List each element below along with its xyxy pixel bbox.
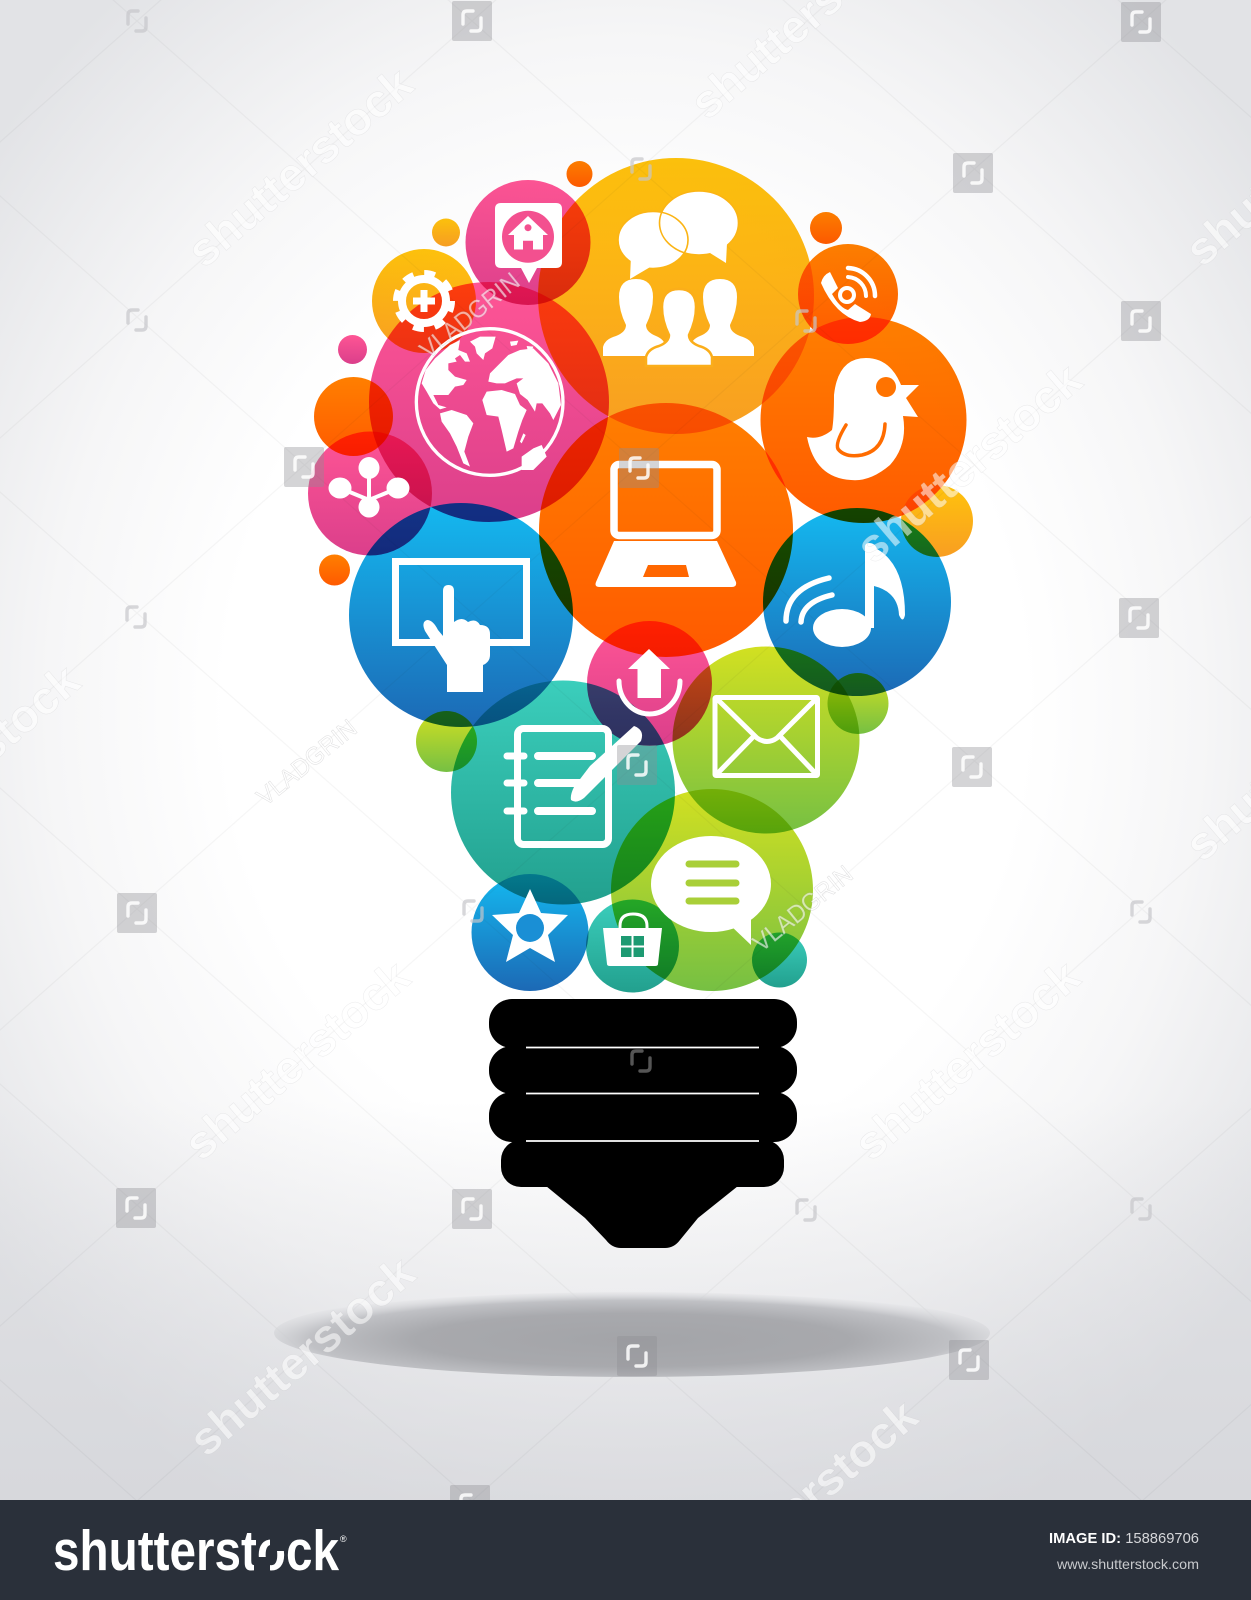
ground shadow [274,1289,990,1377]
bubble: gear [372,249,476,353]
bubble: music [763,508,951,696]
stock watermarks: shutterstock [179,1246,425,1466]
dot: orange lower left [319,554,350,586]
dot: orange left [314,377,393,456]
watermark tiles [116,1,1161,1525]
icon: chat bubble [651,836,771,945]
dot: yellow right [901,485,973,557]
image id: IMAGE ID: 158869706 [1049,1530,1199,1547]
icon: star [492,889,568,962]
bubble: network [308,432,432,556]
icon: mail [715,698,818,776]
icon: globe [416,329,563,475]
stock watermarks: shutterstock [174,950,420,1170]
icon: tablet and hand [396,562,526,692]
dot: teal right [752,932,807,988]
icon: laptop [596,464,736,587]
bubble: mail [672,646,860,834]
footer logo: shutterstock [53,1519,339,1583]
icon: upload [619,649,680,714]
bubble: star [472,874,588,991]
icon: network nodes [328,457,410,518]
dot: green right [828,673,888,734]
icon: music note [786,543,905,647]
bubble: home [466,180,590,305]
bubble: phone [798,244,898,344]
bulb screw base [489,999,797,1248]
icon: basket [603,914,662,966]
icon: speech bubbles [618,191,738,279]
bubble: laptop [539,403,793,657]
footer bar [0,1500,1251,1600]
bubble: bird [760,317,966,523]
dot: green left [416,711,477,772]
bubble: upload [587,621,712,746]
dot: orange top right [810,212,842,244]
stock watermarks: VLADGRIN [415,267,525,364]
icon: phone [821,268,875,322]
site url: www.shutterstock.com [1056,1556,1199,1572]
icon: people [603,279,754,366]
bubble: globe [369,282,609,522]
footer logo: ® [340,1534,347,1544]
bubble: notebook [451,680,675,904]
icon: gear [396,274,452,328]
bulb bubbles cluster [308,158,973,992]
bubble: people [538,158,814,434]
stock watermarks: VLADGRIN [748,860,858,957]
icon: notebook and pen [507,726,642,844]
bubble: chat [611,789,813,991]
bubble: tablet [349,503,573,727]
icon: home marker [495,203,562,283]
dot: pink [338,335,367,364]
stock watermarks: VLADGRIN [252,714,362,811]
bubble: basket [586,900,679,992]
stock watermarks: shutterstock [844,950,1090,1170]
dot: yellow [432,218,460,246]
icon: bird [807,358,919,480]
stock watermarks: shutterstock [177,57,423,277]
stock watermarks: shutterstock [846,353,1092,573]
dot: orange top [566,161,592,187]
